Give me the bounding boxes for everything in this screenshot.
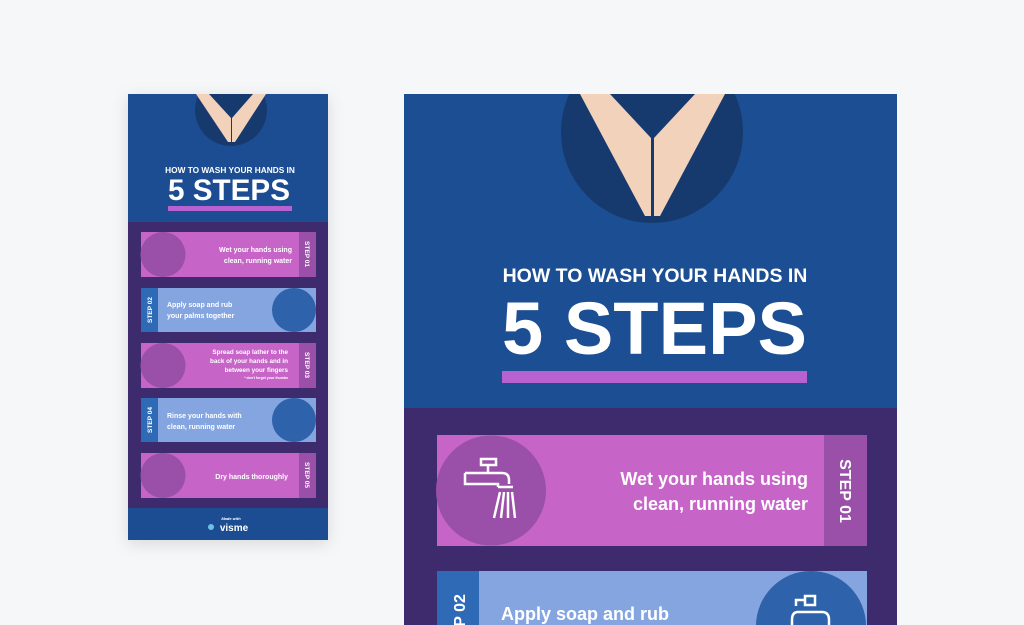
- small step 03: * don't forget your thumbs: [244, 376, 288, 380]
- title: HOW TO WASH YOUR HANDS IN: [503, 265, 807, 287]
- panel: large infographic: [404, 41, 897, 625]
- small step 05: Dry hands thoroughly: [215, 474, 288, 481]
- small step 02: your palms together: [167, 313, 235, 320]
- footer: visme: [208, 518, 248, 531]
- icon: small hands circle: [195, 94, 267, 146]
- footer: visme: Made with: [221, 516, 241, 521]
- small title: 5 STEPS: [168, 174, 290, 207]
- step 01: clean, running water: [633, 494, 808, 514]
- step 02: Apply soap and rub: [501, 604, 669, 624]
- small step 03: between your fingers: [225, 367, 288, 374]
- small step 02: STEP 02: [147, 297, 154, 323]
- small step 05: STEP 05: [303, 462, 310, 488]
- small step 01: Wet your hands using: [219, 247, 292, 254]
- icon: soap: [792, 596, 829, 625]
- small title: HOW TO WASH YOUR HANDS IN: [165, 165, 295, 175]
- step 01: STEP 01: [836, 459, 853, 523]
- small step 02: Apply soap and rub: [167, 302, 232, 309]
- step 01: Wet your hands using: [620, 469, 808, 489]
- small step 01: [140, 232, 316, 277]
- step 01: [436, 435, 867, 546]
- small step 03: back of your hands and in: [210, 358, 288, 365]
- small step 02: [141, 288, 316, 332]
- small step 04: [141, 398, 316, 442]
- icon: hands circle: [561, 94, 743, 223]
- icon: tap: [465, 459, 515, 518]
- step 02: [437, 571, 867, 625]
- small step 04: STEP 04: [147, 407, 154, 433]
- small step 03: Spread soap lather to the: [212, 349, 288, 356]
- panel: small infographic: [128, 74, 328, 540]
- small step 03: [140, 343, 316, 388]
- small step 01: STEP 01: [303, 241, 310, 267]
- small step 05: [140, 453, 316, 498]
- title: 5 STEPS: [502, 287, 807, 370]
- small step 04: clean, running water: [167, 424, 235, 431]
- small title: [165, 165, 295, 211]
- footer: visme: visme: [220, 523, 249, 534]
- small step 04: Rinse your hands with: [167, 413, 242, 420]
- small step 01: clean, running water: [224, 258, 292, 265]
- small step 03: STEP 03: [303, 352, 310, 378]
